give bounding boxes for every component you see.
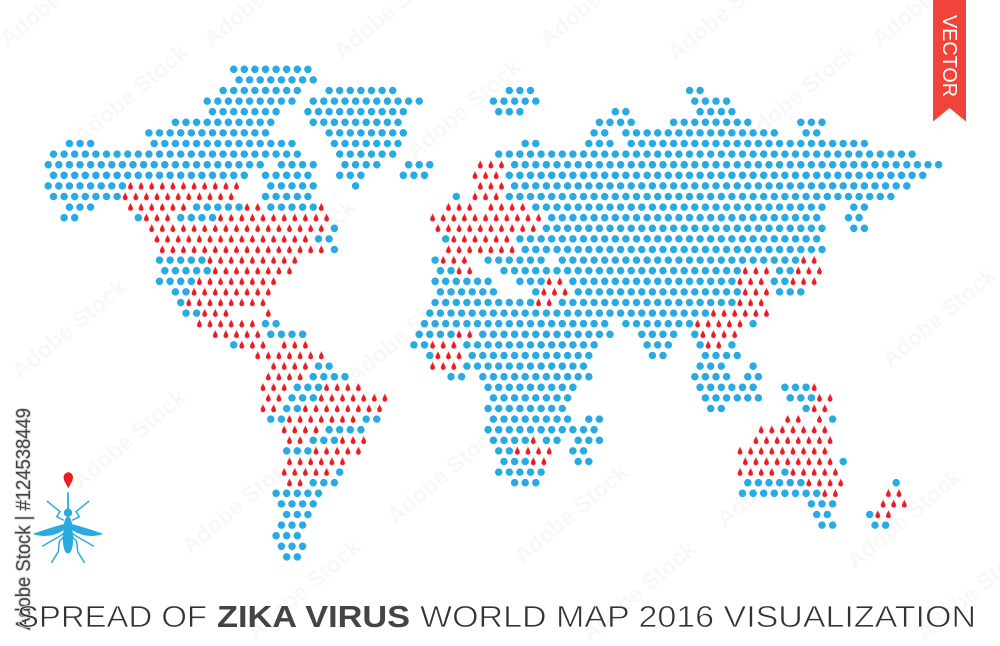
map region: North America [48, 69, 334, 345]
faint diagonal stock watermarks: Adobe Stock [237, 193, 361, 304]
faint diagonal stock watermarks: Adobe Stock [402, 53, 526, 164]
icon: red blood drop [64, 472, 73, 488]
map region: Svalbard [493, 90, 536, 112]
faint diagonal stock watermarks: Adobe Stock [242, 533, 366, 644]
dotted world map [48, 69, 939, 557]
map region: South America [255, 356, 393, 557]
faint diagonal stock watermarks: Adobe Stock [67, 383, 191, 494]
title [17, 599, 976, 634]
map region: New Zealand [870, 483, 912, 525]
New Zealand red Zika drops [875, 493, 912, 514]
stock id side text: Adobe Stock | #124538449 [13, 408, 35, 630]
South America red Zika drops [255, 356, 393, 483]
faint diagonal stock watermarks: Adobe Stock [342, 278, 466, 389]
North America blue dots [48, 69, 334, 345]
Australia red Zika drops [737, 387, 848, 493]
icon: mosquito with blood drop [32, 472, 104, 562]
faint diagonal stock watermarks: Adobe Stock [7, 273, 131, 384]
faint diagonal stock watermarks: Adobe Stock [877, 261, 1000, 372]
New Zealand blue dots [870, 483, 896, 525]
title emphasis: ZIKA VIRUS [217, 599, 410, 634]
faint diagonal stock watermarks: Adobe Stock [577, 535, 701, 646]
title: SPREAD OF [17, 599, 207, 634]
North America red Zika drops [122, 186, 334, 345]
faint diagonal stock watermarks: Adobe Stock [69, 38, 193, 149]
Eurasia and Africa red Zika drops [430, 165, 827, 462]
ribbon: vector badge [933, 0, 966, 122]
map region: Iceland [403, 165, 430, 175]
South America blue dots [271, 366, 377, 557]
faint diagonal stock watermarks: Adobe Stock [177, 448, 301, 559]
Australia blue dots [742, 387, 843, 525]
title remainder: WORLD MAP 2016 VISUALIZATION [420, 599, 976, 634]
faint diagonal stock watermarks: Adobe Stock [382, 418, 506, 529]
faint diagonal stock watermarks: Adobe Stock [712, 421, 836, 532]
mosquito legs and antennae [43, 493, 93, 562]
faint diagonal stock watermarks: Adobe Stock [737, 38, 861, 149]
map region: Greenland [308, 90, 419, 186]
Eurasia and Africa blue dots [414, 90, 939, 483]
ribbon label: VECTOR [938, 15, 960, 97]
map region: Eurasia and Africa [414, 90, 939, 483]
mosquito body and wings [32, 508, 104, 553]
faint diagonal stock watermarks: Adobe Stock [509, 458, 633, 569]
map region: Australia [737, 387, 848, 525]
faint diagonal stock watermarks: Adobe Stock [842, 463, 966, 574]
